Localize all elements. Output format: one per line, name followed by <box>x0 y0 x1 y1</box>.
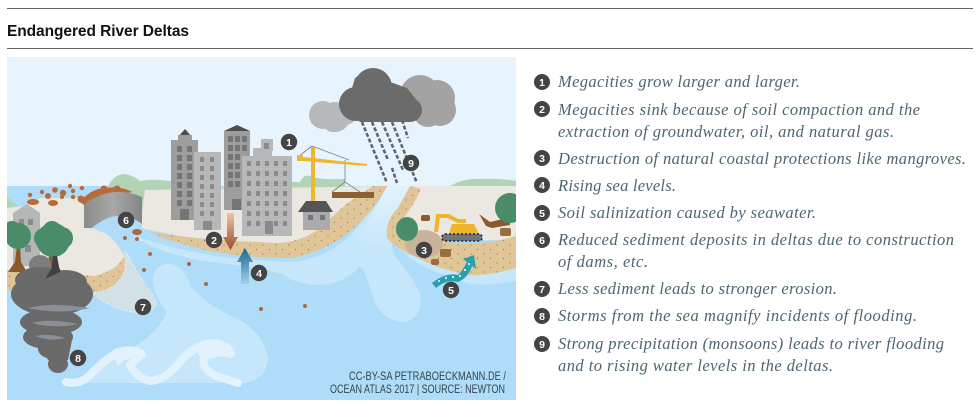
top rule <box>7 8 973 9</box>
building A <box>171 129 198 220</box>
legend item 3: 3 <box>539 153 545 165</box>
legend item 7: 7 <box>539 284 545 296</box>
left land <box>7 198 124 276</box>
legend item 6: 6 <box>539 235 545 247</box>
credit: CC-BY-SA PETRABOECKMANN.DE / <box>349 371 507 383</box>
marker 8 <box>70 350 86 366</box>
building C <box>224 125 250 210</box>
building cluster <box>171 125 292 236</box>
icon: rain <box>362 120 417 183</box>
icon: left trees <box>3 221 73 272</box>
sea <box>7 186 516 400</box>
legend item 6: of dams, etc. <box>558 252 648 271</box>
dam <box>84 192 142 228</box>
title rule <box>7 48 973 49</box>
icon: crane <box>297 146 374 205</box>
marker 2: 2 <box>211 235 217 247</box>
marker 5: 5 <box>448 285 454 297</box>
legend item 1: 1 <box>539 77 545 89</box>
panel: delta illustration <box>3 57 525 400</box>
icon: excavator <box>436 216 482 241</box>
marker 6: 6 <box>123 215 129 227</box>
icon: storm tornado <box>11 255 93 373</box>
marker 6 <box>118 212 134 228</box>
marker 9: 9 <box>408 158 414 170</box>
legend item 9: 9 <box>539 339 545 351</box>
middle land <box>140 186 390 245</box>
marker 3 <box>416 242 432 258</box>
credit: OCEAN ATLAS 2017 | SOURCE: NEWTON <box>330 384 505 396</box>
credit <box>330 371 507 396</box>
dam sediment <box>27 184 132 208</box>
icon: storm cloud <box>309 68 456 132</box>
marker 4 <box>251 265 267 281</box>
legend item 5: Soil salinization caused by seawater. <box>558 203 816 222</box>
marker 9 <box>403 155 419 171</box>
legend item 4: 4 <box>539 180 545 192</box>
building B <box>194 152 221 230</box>
background hills <box>7 174 516 215</box>
marker 2 <box>206 232 222 248</box>
marker 1: 1 <box>286 137 292 149</box>
wave plume <box>80 264 268 383</box>
marker 1 <box>281 134 297 150</box>
legend item 8: 8 <box>539 311 545 323</box>
marker 3: 3 <box>421 245 427 257</box>
legend item 6: Reduced sediment deposits in deltas due to construction <box>557 230 954 249</box>
legend item 3: Destruction of natural coastal protections like mangroves. <box>557 149 966 168</box>
marker 7: 7 <box>140 302 146 314</box>
icon: sinking arrow <box>223 213 238 250</box>
legend item 2 <box>534 100 920 141</box>
legend item 2: 2 <box>539 104 545 116</box>
icon: rising sea arrow <box>237 248 253 284</box>
icon: left house <box>13 204 40 266</box>
sea wave <box>66 341 238 383</box>
drifting sediment <box>123 229 307 311</box>
near-shore light water <box>132 201 421 322</box>
legend item 7: Less sediment leads to stronger erosion. <box>557 279 837 298</box>
legend item 6 <box>534 230 954 271</box>
legend item 2: Megacities sink because of soil compaction and the <box>557 100 920 119</box>
right sand bank <box>387 186 516 275</box>
legend item 9: and to rising water levels in the deltas. <box>558 356 833 375</box>
marker 8: 8 <box>75 353 81 365</box>
marker 7 <box>135 299 151 315</box>
icon: saltwater arrow <box>432 255 476 288</box>
legend item 9 <box>534 334 944 375</box>
legend item 1: Megacities grow larger and larger. <box>557 72 800 91</box>
legend item 4: Rising sea levels. <box>557 176 676 195</box>
water through dam <box>92 216 142 236</box>
left sand <box>7 256 127 296</box>
title: Endangered River Deltas <box>7 23 189 40</box>
marker 5 <box>443 282 459 298</box>
legend item 9: Strong precipitation (monsoons) leads to river flooding <box>558 334 944 353</box>
right land <box>398 186 516 240</box>
icon: right trees and stumps <box>396 193 525 265</box>
building D <box>242 139 292 236</box>
middle sand bank <box>150 186 387 258</box>
right shore light water <box>395 245 516 285</box>
marker 4: 4 <box>256 268 262 280</box>
legend item 8: Storms from the sea magnify incidents of flooding. <box>558 306 917 325</box>
sky <box>7 57 516 187</box>
legend item 5: 5 <box>539 208 545 220</box>
sediment fan <box>93 250 156 313</box>
icon: small house <box>298 201 333 230</box>
river <box>361 186 410 248</box>
deforested ground <box>405 230 443 258</box>
legend list <box>534 72 966 375</box>
legend item 2: extraction of groundwater, oil, and natural gas. <box>558 122 894 141</box>
